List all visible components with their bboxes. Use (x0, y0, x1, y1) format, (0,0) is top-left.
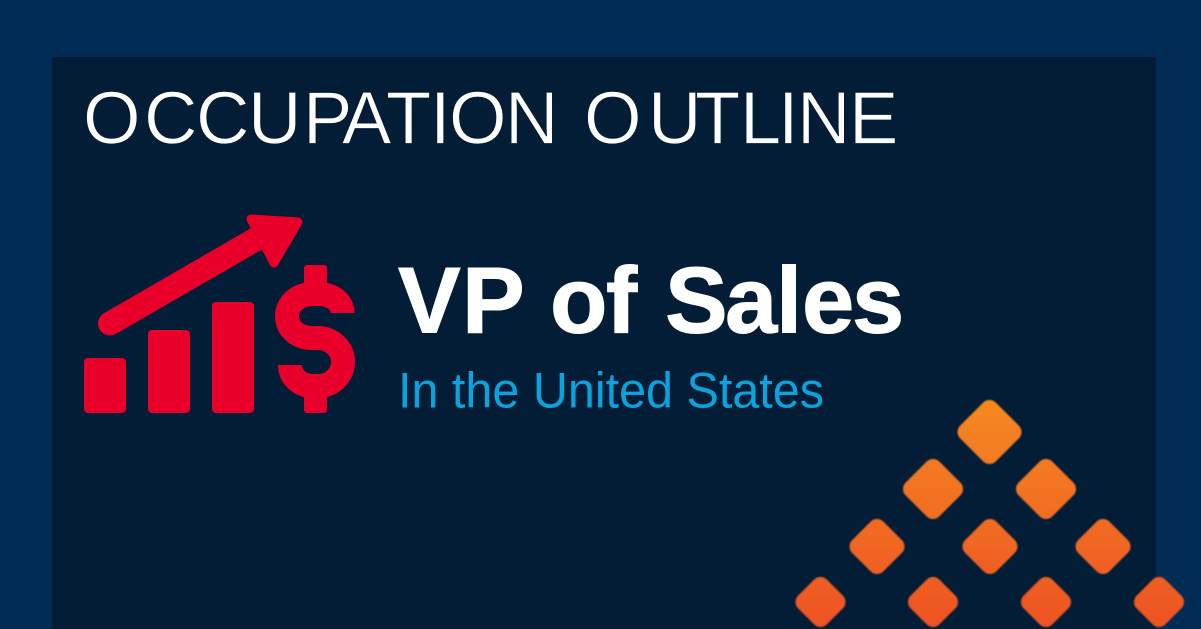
icon: dollar sign (287, 265, 343, 413)
bar: short (84, 358, 126, 413)
title: OCCUPATION OUTLINE (83, 76, 898, 160)
heading: job title: VP of Sales (398, 248, 904, 352)
arrow: rising trend (110, 219, 298, 324)
icon: sales growth chart with dollar sign (84, 219, 343, 413)
bar: medium (148, 330, 190, 413)
bar: tall (212, 302, 254, 413)
subheading: location: In the United States (398, 362, 824, 418)
decoration: orange diamond pyramid (804, 409, 1175, 618)
